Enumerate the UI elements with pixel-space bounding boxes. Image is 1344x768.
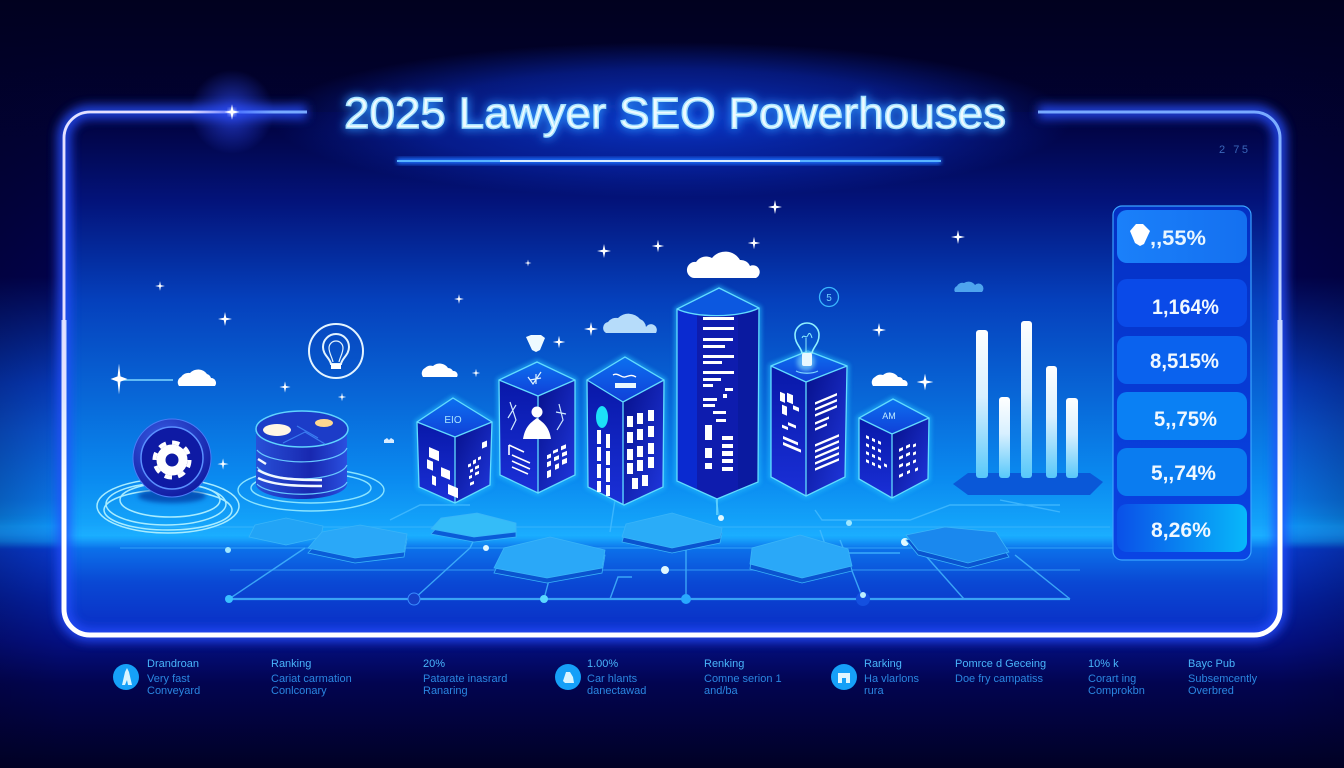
sparkle stars [155,200,965,470]
legend item 4 [555,658,646,697]
legend item 5 [704,658,782,697]
clouds [178,252,983,386]
title underline [397,158,941,164]
icon: left flare line [111,364,173,394]
row 2: 1,164% [1152,296,1219,319]
row 4 [1117,392,1247,440]
legend item 8: 10% k [1088,658,1119,670]
row 6 [1117,504,1247,552]
icon: lightbulb badge [309,324,363,378]
building 5 [771,351,847,496]
building 1 [417,398,492,503]
legend item 9: Subsemcently [1188,673,1258,685]
legend item 5: and/ba [704,685,739,697]
legend item 4: 1.00% [587,658,618,670]
panel: percentage list [1113,206,1251,560]
legend item 3: Ranaring [423,685,468,697]
icon: lightbulb on tower [795,323,819,373]
panel: neon frame interior [64,112,1280,635]
row 2 [1117,279,1247,327]
legend item 1: Drandroan [147,658,199,670]
legend item 6: rura [864,685,884,697]
horizon light band [0,527,1344,539]
legend item 2: Conlconary [271,685,327,697]
legend item 3 [423,658,507,697]
legend item 2 [271,658,352,697]
frame star flare [190,70,274,154]
legend item 9: Bayc Pub [1188,658,1235,670]
legend item 7: Doe fry campatiss [955,673,1044,685]
legend item 8 [1088,658,1145,697]
row 4: 5,,75% [1154,408,1217,431]
legend item 7 [955,658,1046,685]
building 6 [859,399,929,498]
corner label: 2 75 [1219,144,1248,156]
building 6: AM [882,411,896,421]
hexagon platforms [249,513,1009,583]
legend item 4: Car hlants [587,673,638,685]
row 1: ,,55% [1150,227,1206,250]
floor nodes [225,515,909,606]
legend item 1: Conveyard [147,685,200,697]
bar chart [953,321,1103,495]
legend item 9: Overbred [1188,685,1234,697]
legend item 2: Ranking [271,658,311,670]
icon: number badge: 5 [826,293,832,304]
legend item 6: Rarking [864,658,902,670]
legend item 6: Ha vlarlons [864,673,920,685]
legend item 5: Renking [704,658,744,670]
row 5: 5,,74% [1151,462,1216,485]
icon: data stack [238,411,394,511]
legend item 2: Cariat carmation [271,673,352,685]
floor circuit grid [120,500,1120,599]
icon: number badge [820,288,838,306]
legend item 8: Comprokbn [1088,685,1145,697]
legend item 1 [113,658,200,697]
building 1: EIO [444,415,462,426]
icon: gear sphere [97,419,239,533]
legend item 3: Patarate inasrard [423,673,507,685]
row 5 [1117,448,1247,496]
legend item 8: Corart ing [1088,673,1136,685]
legend item 5: Comne serion 1 [704,673,782,685]
legend item 3: 20% [423,658,445,670]
row 6: 8,26% [1151,519,1211,542]
title: 2025 Lawyer SEO Powerhouses [344,89,1006,138]
cloud-topped tower [677,288,759,515]
icon: diamond [526,335,545,352]
building 3 [587,357,664,505]
building 2 [499,362,575,493]
title glow [272,42,1072,198]
frame outline [64,112,1280,635]
legend item 1: Very fast [147,673,190,685]
row 3: 8,515% [1150,350,1219,373]
row 3 [1117,336,1247,384]
legend item 6 [831,658,920,697]
row 1 [1117,210,1247,263]
title: 2025 Lawyer SEO Powerhouses [344,89,1006,138]
legend item 4: danectawad [587,685,646,697]
legend item 7: Pomrce d Geceing [955,658,1046,670]
legend item 9 [1188,658,1258,697]
